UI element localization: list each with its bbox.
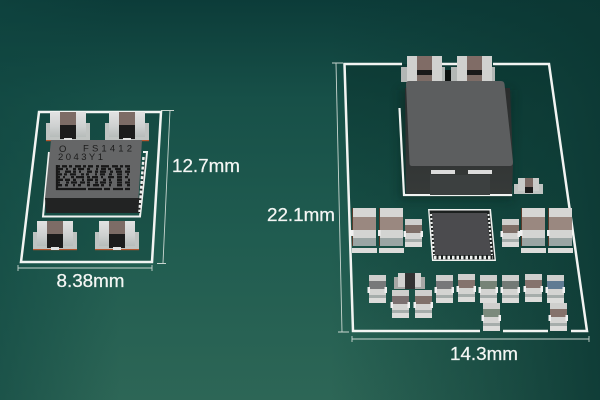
label 8.38mm: 8.38mm <box>56 271 124 291</box>
chip marking text <box>58 144 132 163</box>
dimension width large <box>352 336 589 342</box>
label 12.7mm: 12.7mm <box>172 156 240 176</box>
top capacitor left <box>401 56 445 82</box>
dimension height small <box>157 110 174 264</box>
dimension height large <box>332 63 349 332</box>
top capacitor right <box>451 56 495 82</box>
inductor front block <box>430 175 490 195</box>
board outline small <box>21 112 161 262</box>
inductor top <box>406 81 513 166</box>
label 22.1mm: 22.1mm <box>267 205 335 225</box>
module: small FS1412 footprint <box>21 112 161 262</box>
inductor body <box>405 88 513 194</box>
inductor pins <box>431 170 455 174</box>
capacitor top left <box>46 112 90 141</box>
capacitor bottom right <box>95 221 139 250</box>
large capacitors right <box>520 208 546 253</box>
large capacitors left <box>351 208 377 253</box>
chip marking text: O <box>59 144 66 155</box>
small capacitor left of QFN <box>404 219 423 247</box>
small capacitor right of QFN <box>500 219 520 247</box>
dark chip in passive group <box>394 273 425 289</box>
chip marking text: 2043Y1 <box>58 152 103 163</box>
gap between top capacitors <box>445 70 451 81</box>
passive row 1 <box>368 274 565 303</box>
inductor shadow <box>400 90 512 200</box>
module: larger discrete footprint <box>344 56 587 331</box>
inductor outline <box>400 108 511 195</box>
capacitor top right <box>105 112 149 141</box>
passive row 2 <box>390 290 568 331</box>
capacitor bottom left <box>33 221 77 250</box>
chip side pads <box>140 157 144 212</box>
label 14.3mm: 14.3mm <box>450 344 518 364</box>
data matrix <box>56 165 130 190</box>
chip inner white outline <box>43 152 147 216</box>
chip top surface <box>45 140 142 198</box>
chip side <box>45 153 146 213</box>
QFN controller IC <box>428 209 496 261</box>
dimension width small <box>18 265 152 271</box>
board fill large <box>345 64 587 331</box>
small capacitor beside inductor <box>514 178 543 194</box>
board outline large <box>344 64 587 331</box>
chip marking text: FS1412 <box>83 144 132 154</box>
